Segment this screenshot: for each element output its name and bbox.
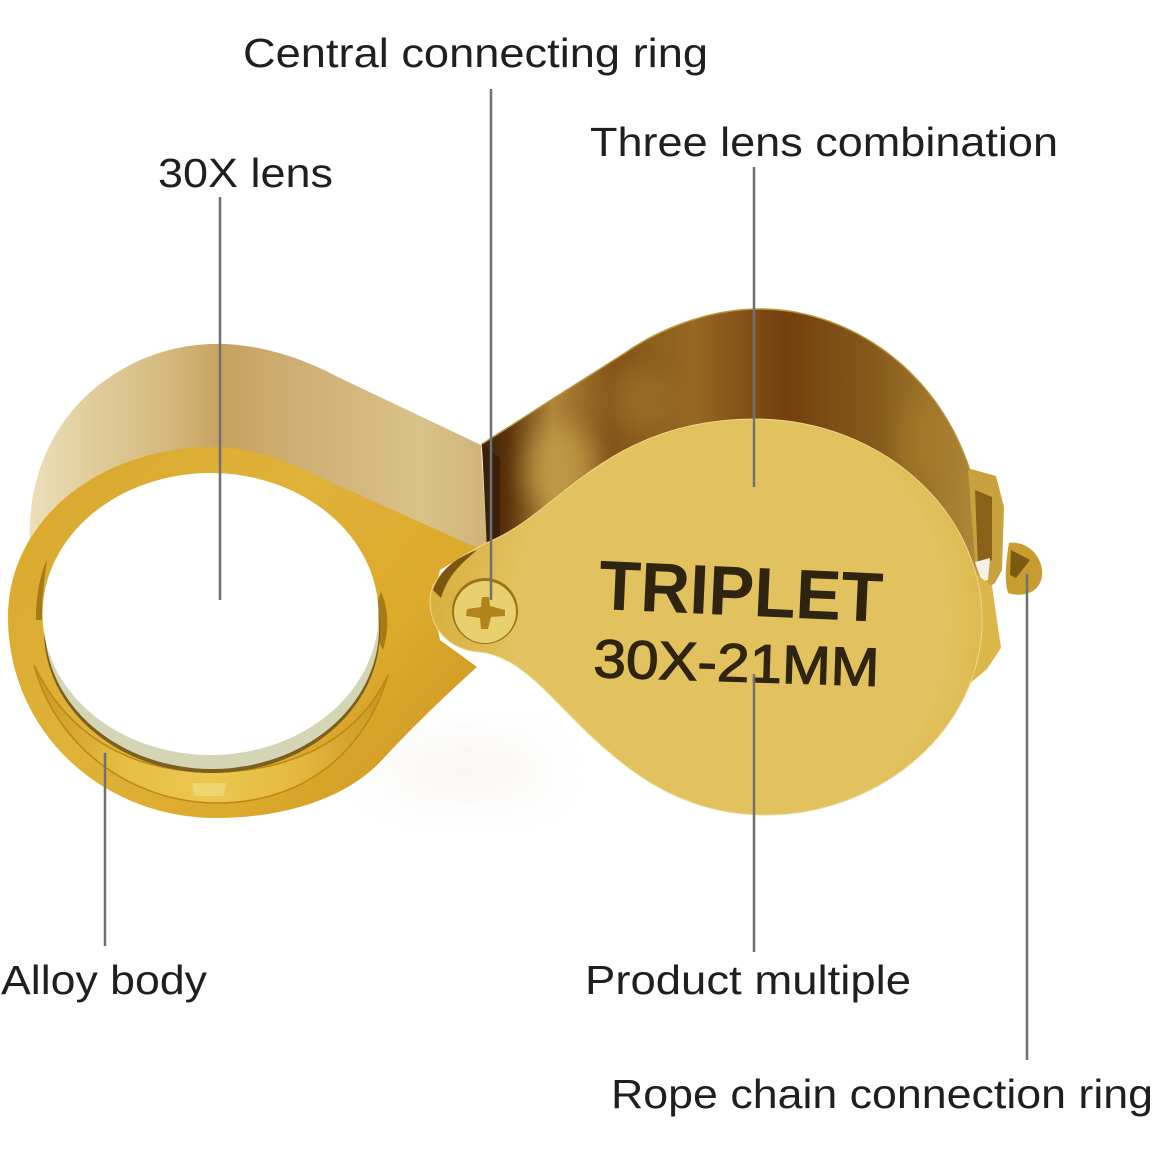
label: Alloy body: Alloy body	[1, 957, 208, 1003]
leader line: central ring	[490, 89, 492, 600]
leader line: 30X lens	[219, 197, 221, 600]
left ring front body	[8, 447, 477, 818]
rim bevel	[34, 665, 388, 803]
right cover plate	[430, 419, 1001, 815]
hinge screw	[452, 578, 518, 644]
label: Central connecting ring: Central connecting ring	[243, 30, 708, 76]
leader line: rope ring	[1026, 574, 1028, 1060]
right cover back shell	[482, 309, 985, 590]
engraved text: TRIPLET: TRIPLET	[597, 546, 885, 637]
label: Product multiple: Product multiple	[585, 957, 911, 1003]
soft ground shadow	[380, 740, 550, 800]
rope chain ring	[1006, 543, 1042, 595]
label: Three lens combination: Three lens combination	[590, 119, 1058, 165]
label: Rope chain connection ring: Rope chain connection ring	[611, 1071, 1153, 1117]
icon: bottom rim highlight	[192, 783, 226, 796]
icon: lens glass	[42, 473, 380, 773]
leader line: three lens	[753, 167, 755, 487]
left lens casing back	[30, 344, 487, 600]
leader line: alloy body	[104, 753, 106, 946]
engraved text: 30X-21MM: 30X-21MM	[593, 629, 880, 698]
label: 30X lens: 30X lens	[158, 150, 333, 196]
left inner lip shadow	[36, 560, 47, 620]
leader line: product multiple	[753, 674, 755, 952]
clasp tab	[968, 469, 1004, 590]
right inner lip shadow	[378, 592, 387, 650]
hinge shadow	[433, 550, 477, 598]
